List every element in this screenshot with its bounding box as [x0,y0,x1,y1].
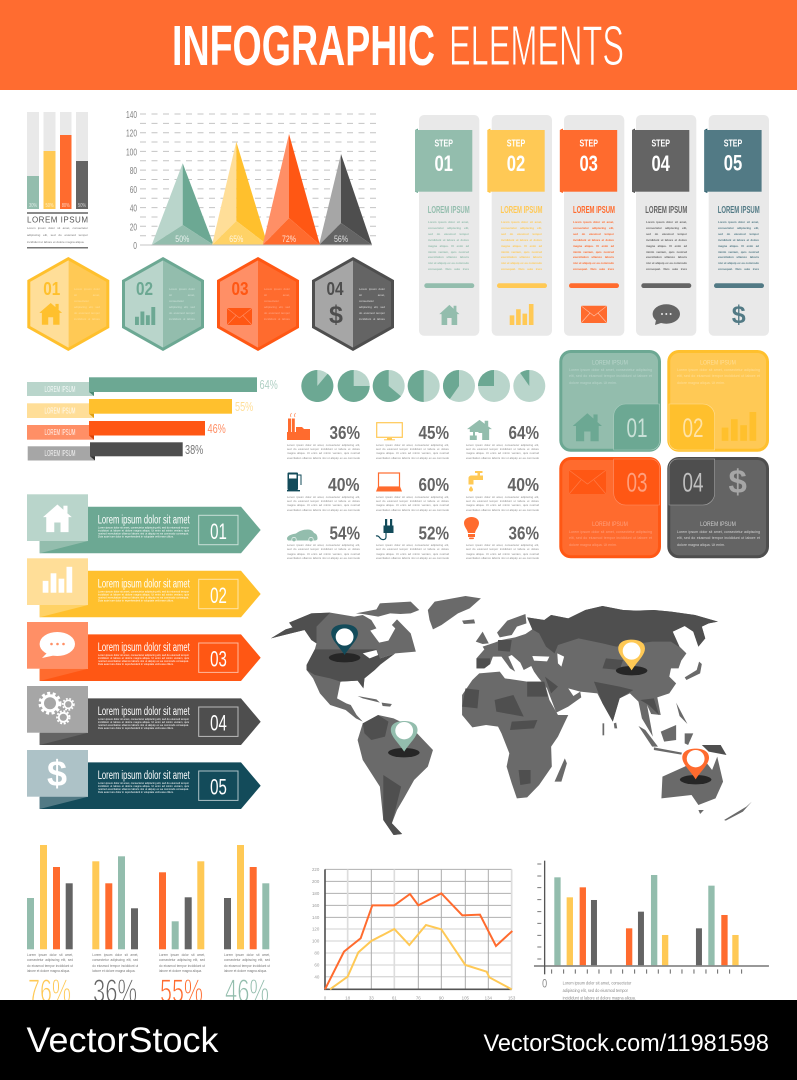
world map with pins [271,596,752,835]
panel: tile 02: Lorem ipsum dolor sit amet, consectetur adipiscing elit, sed do eiusmod tempor incididunt ut labore et dolore magna aliqua. Ut enim. [677,368,760,385]
panel: step 02 [487,115,552,336]
chart: bottom bars group 2: Lorem ipsum dolor sit amet, consectetur adipiscing elit, sed do eiusmod tempor incididunt ut labore et dolore magna aliqua. [92,953,138,973]
panel: stat 60% laptop [376,473,449,512]
panel: arrow banner 02 [27,558,261,617]
chart: right column chart: adipiscing elit, sed do eiusmod tempor [563,988,628,993]
panel: stacked progress bars: 80% [62,203,70,209]
panel: tile 04: $ [729,463,747,500]
header banner [0,0,797,90]
chart: bottom bars group 4: Lorem ipsum dolor sit amet, consectetur adipiscing elit, sed do eiusmod tempor incididunt ut labore et dolore magna aliqua. [224,953,270,973]
chart: line chart: 100 [312,939,320,945]
footer logo text: VectorStock [26,1021,219,1060]
chart: line chart: 153 [508,996,516,1002]
panel: step 01 [415,115,479,336]
panel: hexagon 04 [314,259,392,349]
chart: right column chart: 0 [542,977,547,991]
chart: line chart: 18 [345,996,350,1002]
panel: arrow banner 04: Lorem ipsum dolor sit amet, consectetur adipiscing elit, sed do eiusmod tempor incididunt ut labore et dolore magna aliqua. Ut enim ad minim veniam, quis nostrud exercitation ullamco laboris nisi ut aliquip ex ea commodo consequat. Duis aute irure dolor in reprehenderit in voluptate velit esse cillum. [98,718,189,730]
chart: bottom bars group 1 [27,845,73,1009]
chart: horizontal bars [27,377,278,460]
pin: australia [680,749,711,784]
icon: faucet [468,471,483,492]
chart: pyramid chart: 40 [130,203,137,215]
panel: arrow banner 03: 03 [210,646,227,672]
chart: pyramid chart: 80 [130,165,137,177]
chart: row of pies [301,370,545,402]
icon: gears [40,693,74,724]
panel: tile 03: LOREM IPSUM [592,522,628,528]
panel: step 03 [560,115,624,336]
panel: arrow banner 03: Lorem ipsum dolor sit amet [98,642,190,654]
icon: laptop [376,473,402,492]
pin: asia [616,640,647,675]
icon: car [287,530,318,542]
chart: line chart: 134 [485,996,492,1002]
panel: tile 01: LOREM IPSUM [592,361,628,367]
chart: horizontal bars: LOREM IPSUM [44,449,76,458]
panel: hexagon 04: 04 [326,278,344,299]
chart: pyramid chart [126,109,380,252]
panel: arrow banner 04: 04 [210,710,227,736]
panel: step 05: $ [732,301,746,329]
panel: step 05: LOREM IPSUM [718,205,760,216]
icon: factory [287,413,310,440]
panel: hexagon 02: 02 [136,278,153,299]
panel: stat 45% monitor: 45% [418,423,449,443]
chart: line chart: 200 [312,879,320,885]
panel: arrow banner 03: Lorem ipsum dolor sit amet, consectetur adipiscing elit, sed do eiusmod tempor incididunt ut labore et dolore magna aliqua. Ut enim ad minim veniam, quis nostrud exercitation ullamco laboris nisi ut aliquip ex ea commodo consequat. Duis aute irure dolor in reprehenderit in voluptate velit esse cillum. [98,654,189,666]
chart: pyramid chart: 100 [126,146,137,158]
chart: line chart: 90 [439,996,444,1002]
chart: horizontal bars: 46% [208,422,226,436]
panel: stat 52% plug [376,519,449,561]
panel: step 05: 05 [724,150,742,176]
panel: tile 04: LOREM IPSUM [700,522,736,528]
map: land masses [271,596,752,835]
panel: stat 36% bulb [464,517,539,561]
chart: pyramid chart: 60 [130,184,137,196]
panel: hexagon 03 [218,259,298,349]
panel: step 03: LOREM IPSUM [573,205,615,216]
panel: tile 01 [561,352,660,450]
chart: line chart: 140 [312,915,320,921]
chart: horizontal bars: 55% [235,400,253,414]
chart: line chart: 60 [314,963,320,969]
panel: step 02: LOREM IPSUM [500,205,542,216]
chart: bottom bars group 3: Lorem ipsum dolor sit amet, consectetur adipiscing elit, sed do eiusmod tempor incididunt ut labore et dolore magna aliqua. [159,953,205,973]
panel: stat 36% bulb: 36% [508,523,539,543]
chart: line chart: 76 [416,996,421,1002]
chart: bottom bars group 2: 36% [93,973,137,1009]
chart: line chart: 120 [312,927,320,933]
panel: stacked progress bars: 50% [78,203,86,209]
icon: light bulb [464,517,479,539]
panel: arrow banner 05: Lorem ipsum dolor sit amet [98,770,190,782]
panel: step 02: 02 [507,151,525,176]
footer bar [0,1000,797,1080]
panel: arrow banner 05: 05 [210,774,227,800]
chart: horizontal bars: 64% [260,378,278,392]
icon: monitor [377,423,402,440]
chart: bottom bars group 1: Lorem ipsum dolor sit amet, consectetur adipiscing elit, sed do eiusmod tempor incididunt ut labore et dolore magna aliqua. [27,953,73,973]
chart: pyramid chart: 72% [282,234,296,245]
chart: pyramid chart: 20 [130,221,137,233]
panel: arrow banner 04 [27,686,261,745]
icon: plug [376,519,394,540]
map: water cutouts [363,650,580,696]
chart: line chart: 220 [312,867,320,873]
chart: horizontal bars: 38% [185,443,203,457]
chart: line chart [312,867,516,1002]
panel: stacked progress bars: 30% [29,203,37,209]
panel: step 01: STEP [434,138,453,150]
panel: arrow banner 05 [27,750,261,809]
panel: tile 01: Lorem ipsum dolor sit amet, consectetur adipiscing elit, sed do eiusmod tempor incididunt ut labore et dolore magna aliqua. Ut enim. [569,368,652,385]
panel: step 01: 01 [434,151,453,176]
panel: arrow banner 02: 02 [210,583,227,608]
chart: right column chart: incididunt ut labore et dolore magna aliqua. [563,995,636,1000]
pin: south america [388,721,420,757]
chart: pyramid chart: 0 [133,240,137,252]
panel: arrow banner 01 [27,494,261,553]
chart: pyramid chart: 120 [126,128,137,140]
chart: right column chart [534,861,769,1000]
panel: stat 54% car: 54% [330,523,360,543]
icon: house with windows [467,420,492,440]
panel: tile 04 [669,458,768,557]
panel: tile 03 [561,458,660,557]
pyramid 3 [263,134,320,245]
pyramid 4 [319,154,372,245]
chart: pyramid chart: 56% [334,234,348,245]
chart: pyramid chart: 140 [126,109,137,121]
chart: right column chart: Lorem ipsum dolor sit amet, consectetur [563,981,632,986]
panel: hexagon 02 [124,259,202,349]
panel: tile 03: Lorem ipsum dolor sit amet, consectetur adipiscing elit, sed do eiusmod tempor incididunt ut labore et dolore magna aliqua. Ut enim. [569,530,652,547]
pyramid 1 [152,163,214,245]
panel: step 03: STEP [579,138,598,150]
panel: arrow banner 03 [27,622,261,681]
panel: stat 64% house [466,420,539,460]
chart: line chart: 80 [314,951,320,957]
panel: tile 04: Lorem ipsum dolor sit amet, consectetur adipiscing elit, sed do eiusmod tempor incididunt ut labore et dolore magna aliqua. Ut enim. [677,530,760,547]
chart: bottom bars group 2 [92,856,138,1009]
panel: hexagon 04: $ [329,301,343,329]
panel: arrow banner 01: Lorem ipsum dolor sit amet, consectetur adipiscing elit, sed do eiusmod tempor incididunt ut labore et dolore magna aliqua. Ut enim ad minim veniam, quis nostrud exercitation ullamco laboris nisi ut aliquip ex ea commodo consequat. Duis aute irure dolor in reprehenderit in voluptate velit esse cillum. [98,526,189,539]
panel: arrow banner 05: $ [47,753,67,794]
panel: stacked progress bars: LOREM IPSUM [27,216,88,224]
chart: line chart: 180 [312,891,320,897]
panel: stat 64% house: 64% [508,423,539,443]
pin: north america [329,624,360,662]
chart: line chart: 33 [369,996,374,1002]
panel: step 02: STEP [507,138,525,150]
panel: step 04 [632,115,696,336]
panel: step 05: STEP [724,138,742,150]
chart: bottom bars group 3: 55% [160,973,203,1009]
panel: arrow banner 02: Lorem ipsum dolor sit amet, consectetur adipiscing elit, sed do eiusmod tempor incididunt ut labore et dolore magna aliqua. Ut enim ad minim veniam, quis nostrud exercitation ullamco laboris nisi ut aliquip ex ea commodo consequat. Duis aute irure dolor in reprehenderit in voluptate velit esse cillum. [98,590,189,603]
panel: arrow banner 04: Lorem ipsum dolor sit amet [98,706,190,718]
panel: step 03: 03 [579,151,598,176]
panel: arrow banner 01: Lorem ipsum dolor sit amet [98,514,190,526]
chart: pyramid chart: 65% [229,234,244,245]
panel: tile 02 [669,352,768,450]
footer image id: VectorStock.com/11981598 [484,1030,769,1057]
panel: step 04: 04 [651,151,671,176]
panel: stat 54% car [287,523,360,561]
panel: stacked progress bars [27,112,88,248]
chart: pyramid chart: 50% [175,234,190,245]
chart: line chart: 160 [312,903,320,909]
panel: stacked progress bars: Lorem ipsum dolor sit amet, consectetur adipiscing elit, sed do eiusmod tempor incididunt ut labore et dolore magna aliqua. [27,226,88,244]
panel: hexagon 03: 03 [232,278,248,299]
panel: stat 36% factory: 36% [330,423,360,443]
panel: stat 40% fuel [287,472,360,512]
chart: bottom bars group 4 [224,845,270,1009]
chart: bottom bars group 1: 76% [28,973,71,1009]
pyramid 2 [212,142,268,245]
panel: stat 40% water: 40% [508,475,539,495]
panel: stat 60% laptop: 60% [418,475,449,495]
title: ELEMENTS [449,14,624,78]
chart: horizontal bars: LOREM IPSUM [44,406,76,415]
chart: line chart: 105 [462,996,469,1002]
panel: step 01: LOREM IPSUM [428,205,470,216]
panel: hexagon 01 [29,259,108,349]
chart: horizontal bars: LOREM IPSUM [44,428,76,437]
panel: stat 45% monitor [376,423,449,460]
panel: stacked progress bars: 50% [46,203,54,209]
chart: line chart: 61 [392,996,397,1002]
panel: stat 40% water [466,471,539,512]
panel: tile 02: 02 [682,413,704,443]
title: INFOGRAPHIC [172,14,435,78]
panel: arrow banner 01: 01 [210,519,227,544]
panel: tile 01: 01 [626,413,648,443]
chart: line chart: 0 [324,996,326,1002]
panel: stat 40% fuel: 40% [328,475,360,495]
panel: hexagon 01: 01 [43,278,60,299]
panel: stat 52% plug: 52% [418,523,449,543]
panel: step 04: LOREM IPSUM [645,205,687,216]
chart: bottom bars group 4: 46% [225,973,269,1009]
panel: step 05 [704,115,769,336]
chart: bottom bars group 3 [159,861,205,1009]
panel: arrow banner 05: Lorem ipsum dolor sit amet, consectetur adipiscing elit, sed do eiusmod tempor incididunt ut labore et dolore magna aliqua. Ut enim ad minim veniam, quis nostrud exercitation ullamco laboris nisi ut aliquip ex ea commodo consequat. Duis aute irure dolor in reprehenderit in voluptate velit esse cillum. [98,782,189,794]
panel: stat 36% factory [287,413,360,460]
panel: arrow banner 02: Lorem ipsum dolor sit amet [98,578,190,590]
chart: line chart: 40 [314,974,320,980]
panel: step 04: STEP [651,138,670,150]
panel: tile 02: LOREM IPSUM [700,361,736,367]
panel: tile 04: 04 [682,468,704,498]
chart: horizontal bars: LOREM IPSUM [44,385,76,394]
panel: tile 03: 03 [626,468,648,498]
icon: fuel pump [287,472,301,491]
